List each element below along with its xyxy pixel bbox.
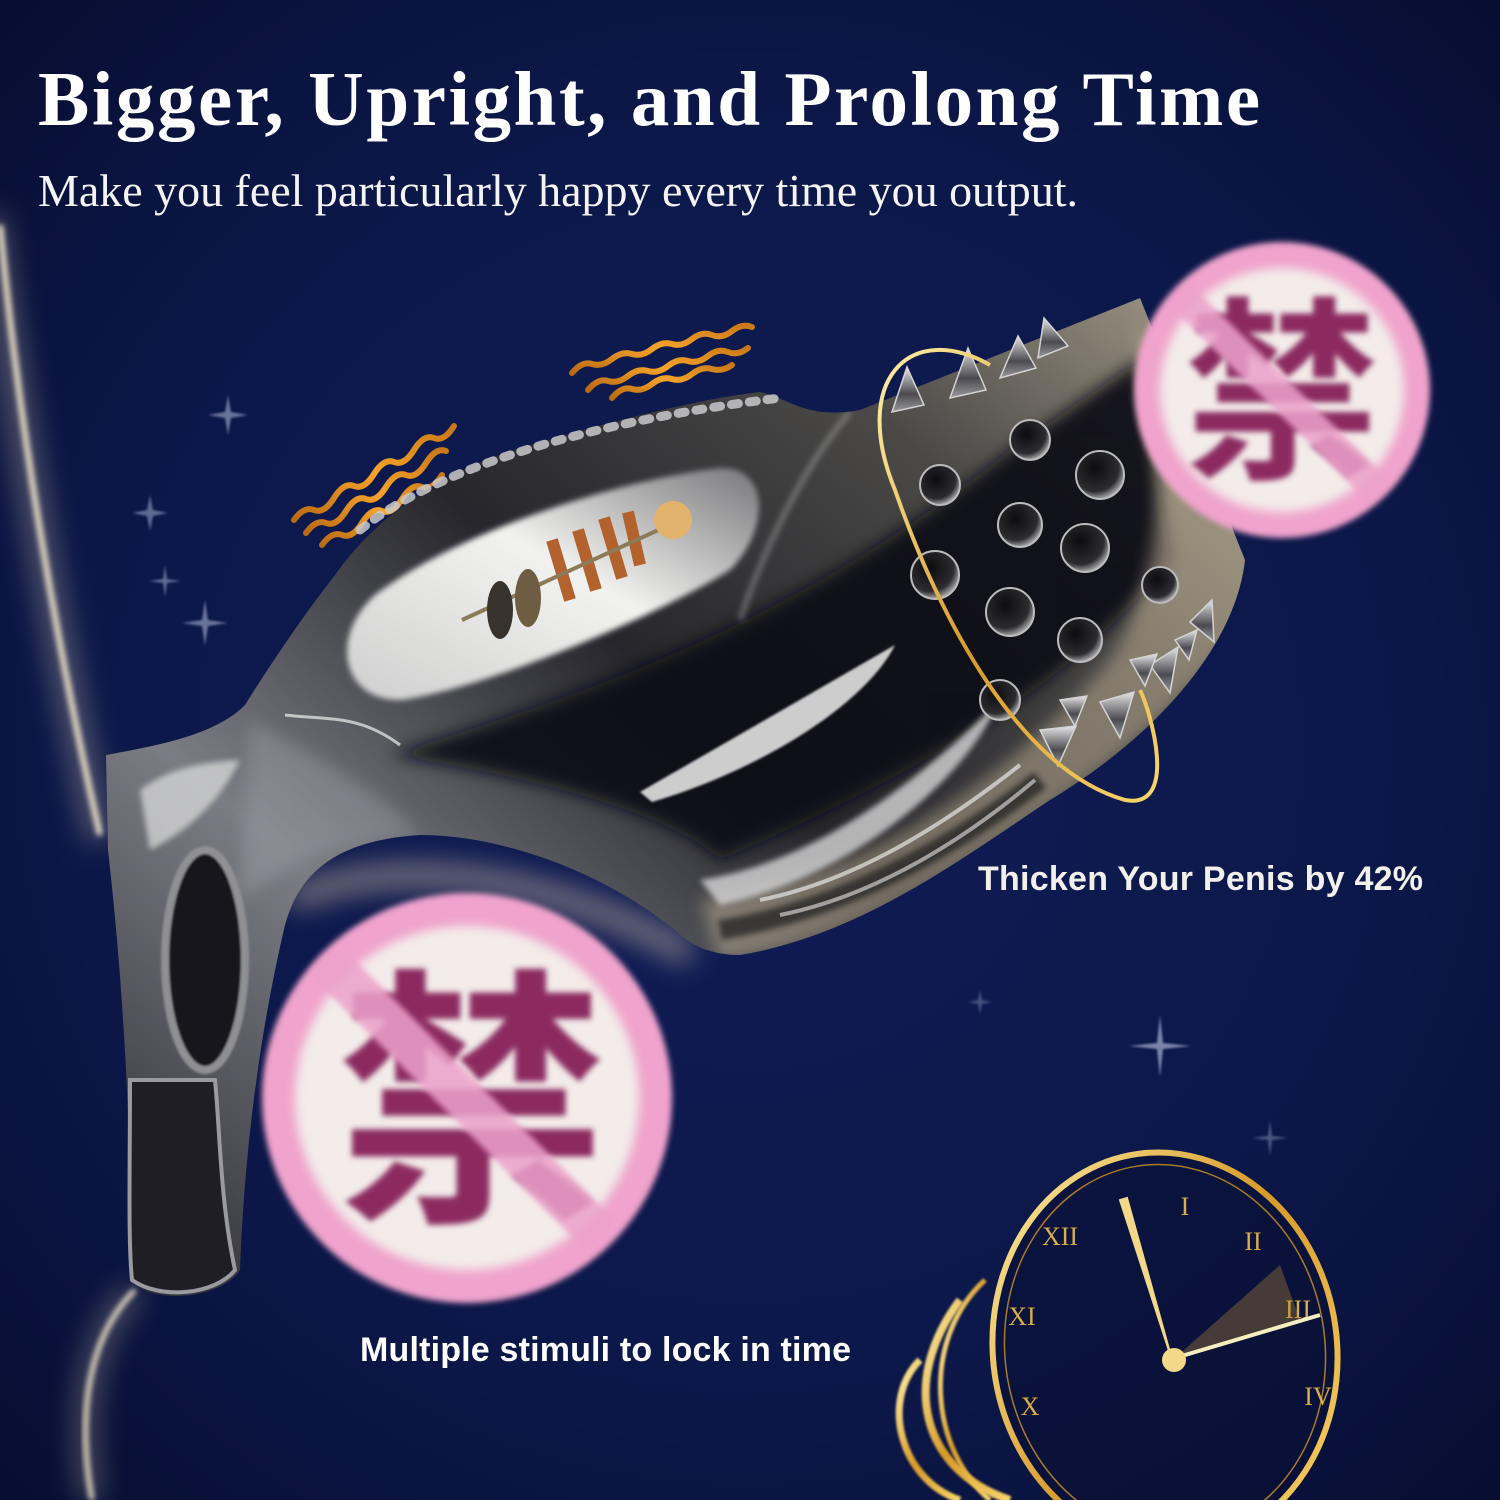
label: thicken: Thicken Your Penis by 42% bbox=[978, 860, 1423, 898]
censor badge bottom: 禁 bbox=[336, 954, 608, 1258]
censor badge top: 禁 bbox=[1184, 286, 1380, 505]
clock numerals: XI bbox=[1008, 1302, 1036, 1331]
lower strap bbox=[130, 1080, 235, 1292]
clock numerals: III bbox=[1285, 1295, 1311, 1324]
icon: gold clock bbox=[899, 1130, 1363, 1500]
clock numerals bbox=[1008, 1192, 1332, 1421]
censor badge top bbox=[1134, 242, 1430, 538]
figure silhouette glow bbox=[0, 215, 690, 1500]
upper ridge beads bbox=[360, 398, 780, 530]
sweep fan bbox=[1175, 1265, 1300, 1358]
clock numerals: I bbox=[1181, 1192, 1189, 1221]
clock numerals: XII bbox=[1042, 1222, 1078, 1251]
clock face bbox=[967, 1130, 1363, 1500]
product: clear sleeve bbox=[106, 298, 1260, 1296]
sleeve silhouette bbox=[106, 298, 1245, 1296]
motor shaft bbox=[462, 520, 680, 620]
clock numerals: X bbox=[1021, 1392, 1040, 1421]
title: Bigger, Upright, and Prolong Time bbox=[38, 56, 1260, 142]
glass shading bbox=[140, 320, 1260, 960]
hour hand bbox=[1175, 1315, 1320, 1358]
clock numerals: II bbox=[1244, 1227, 1262, 1256]
censor badge bottom bbox=[262, 893, 672, 1303]
sparkles bbox=[132, 395, 1288, 1156]
clock center bbox=[1162, 1348, 1186, 1372]
label: stimuli: Multiple stimuli to lock in time bbox=[360, 1331, 851, 1369]
icon: vibration waves right bbox=[572, 326, 752, 398]
motor rotor bbox=[552, 512, 640, 600]
nubs bbox=[911, 420, 1178, 720]
ring opening bbox=[165, 850, 245, 1070]
clock numerals: IV bbox=[1304, 1382, 1332, 1411]
icon: vibration waves left bbox=[294, 426, 454, 545]
spikes top bbox=[892, 318, 1214, 766]
subtitle: Make you feel particularly happy every time you output. bbox=[38, 165, 1078, 216]
gold ring bbox=[880, 350, 1157, 801]
clock swirls bbox=[899, 1280, 1010, 1500]
minute hand bbox=[1120, 1198, 1172, 1360]
motor capsule bbox=[347, 468, 759, 700]
